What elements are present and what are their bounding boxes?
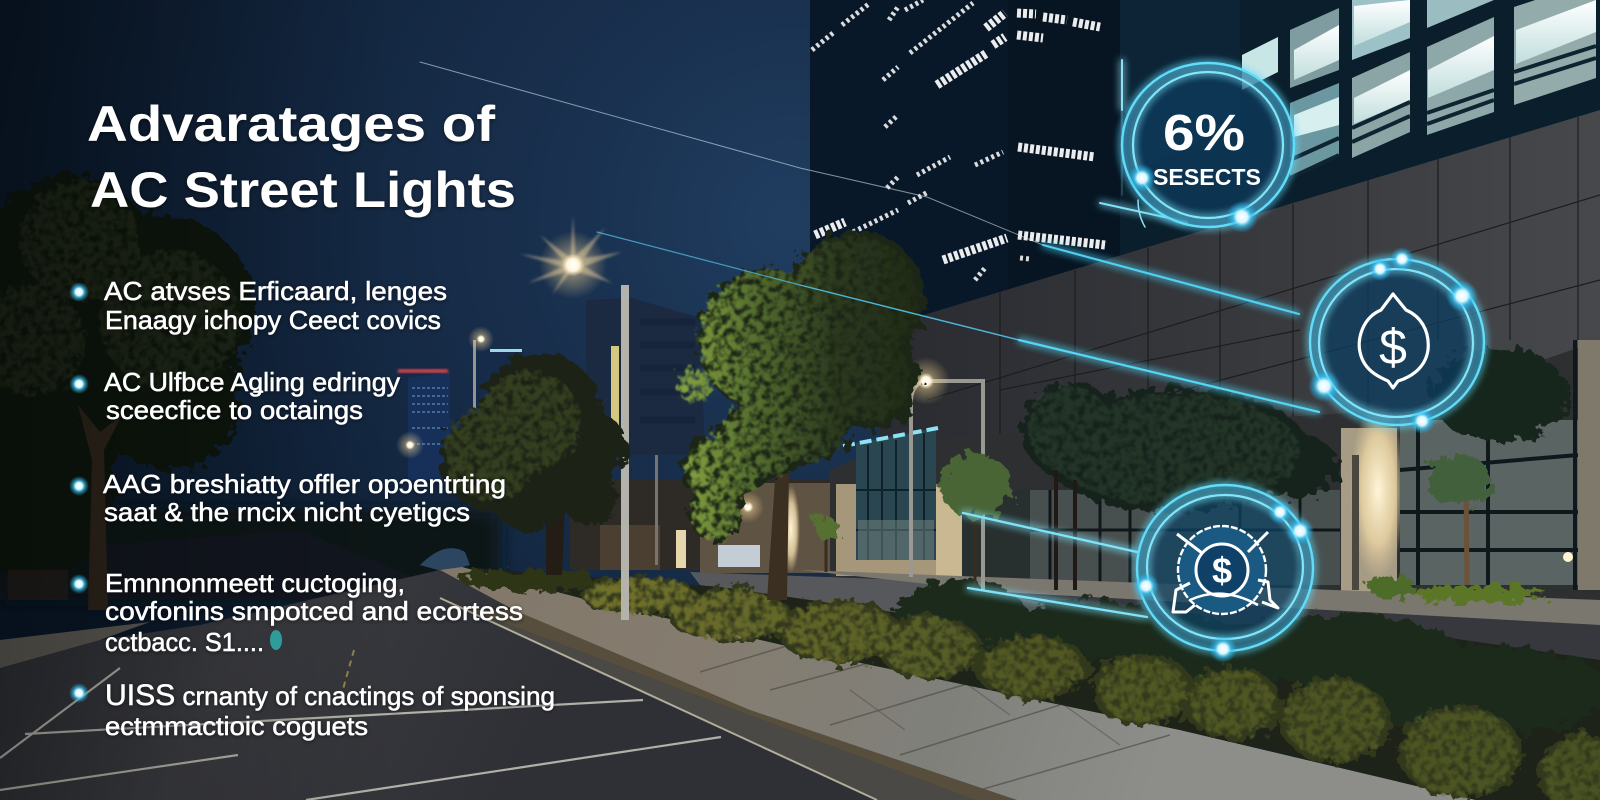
bullet item 2: AC Ulfbce Aǥling edringy: [104, 367, 400, 397]
ground: street and far sidewalk: [690, 570, 1600, 670]
trees: dark trees in front of the building: [813, 382, 1338, 590]
parked vehicle: [420, 548, 470, 572]
sidewalk surface: [440, 567, 1476, 800]
bullet item 4: covfonins smpotced and ecortess: [105, 596, 523, 626]
bullet item 2: [69, 367, 400, 425]
office building: upper glazed floors: [1120, 0, 1600, 265]
trees: right tree: [1426, 347, 1568, 585]
callout ring: 6% statistic: [1122, 63, 1294, 233]
office building: panelled wall: [880, 110, 1600, 600]
title: AC Street Lights: [90, 162, 516, 218]
callout ring: coin icon: [1133, 485, 1314, 663]
shrubs beside far sidewalk: [1368, 575, 1416, 599]
bullet item 3: AAG breshiatty offler opɔentrting: [103, 469, 506, 499]
bullet item 1: [69, 276, 447, 335]
bullet item 4: cctbacc. S1....: [105, 627, 264, 657]
hedge and shrubs: [460, 567, 1600, 800]
trees: middle tree: [440, 353, 627, 575]
callout ring: money bag icon: [1308, 247, 1484, 434]
bullet item 3: saat & the rncix nicht cyetigcs: [104, 497, 470, 527]
bullet item 4: Emnnonmeett cuctoging,: [105, 568, 405, 598]
title: [87, 96, 516, 218]
road: [0, 570, 1017, 800]
street lamp: second lamp: [581, 357, 983, 590]
bullet item 5: UISS crnanty of cnactings of sponsing: [105, 679, 555, 712]
bullet item 4: [69, 568, 523, 657]
distant buildings: [0, 298, 870, 600]
left side darkening for legibility: [0, 0, 400, 800]
bullet item 2: sceecfice to octaings: [106, 395, 363, 425]
icon: dollar money bag: [1359, 294, 1428, 388]
statistic value: 6%: [1163, 104, 1245, 161]
icon: dollar money bag: $: [1379, 319, 1407, 375]
trees: central tree: [677, 230, 925, 600]
office building: ground floor facade: [830, 340, 1600, 600]
bullet item 1: Enaagy ichopy Ceect covics: [105, 305, 441, 335]
bullet item 3: [69, 469, 506, 527]
trees: left dark tree: [0, 175, 255, 610]
statistic label: SESECTS: [1153, 164, 1261, 190]
icon: dollar coin with spikes: $: [1212, 550, 1232, 591]
lit shrub row: [582, 577, 1600, 800]
dark glass tower with lit windows: [810, 0, 1248, 330]
bullet list: [69, 276, 555, 741]
soil and dark planting bed: [462, 567, 1600, 800]
bullet item 5: ectmmactioic coguets: [105, 711, 368, 741]
gutter strip: [440, 598, 975, 800]
sidewalk and curb: [440, 567, 1476, 800]
icon: dollar coin with spikes: [1173, 526, 1278, 614]
street lamp: main pole and star glare: [520, 215, 629, 620]
bullet item 5: [69, 679, 555, 741]
title: Advaratages of: [87, 96, 495, 152]
icon: small teal leaf: [270, 630, 282, 650]
curb face: [470, 610, 1017, 800]
connector lines: [420, 60, 1319, 617]
bullet item 1: AC atvses Erficaard, lenges: [104, 276, 447, 306]
